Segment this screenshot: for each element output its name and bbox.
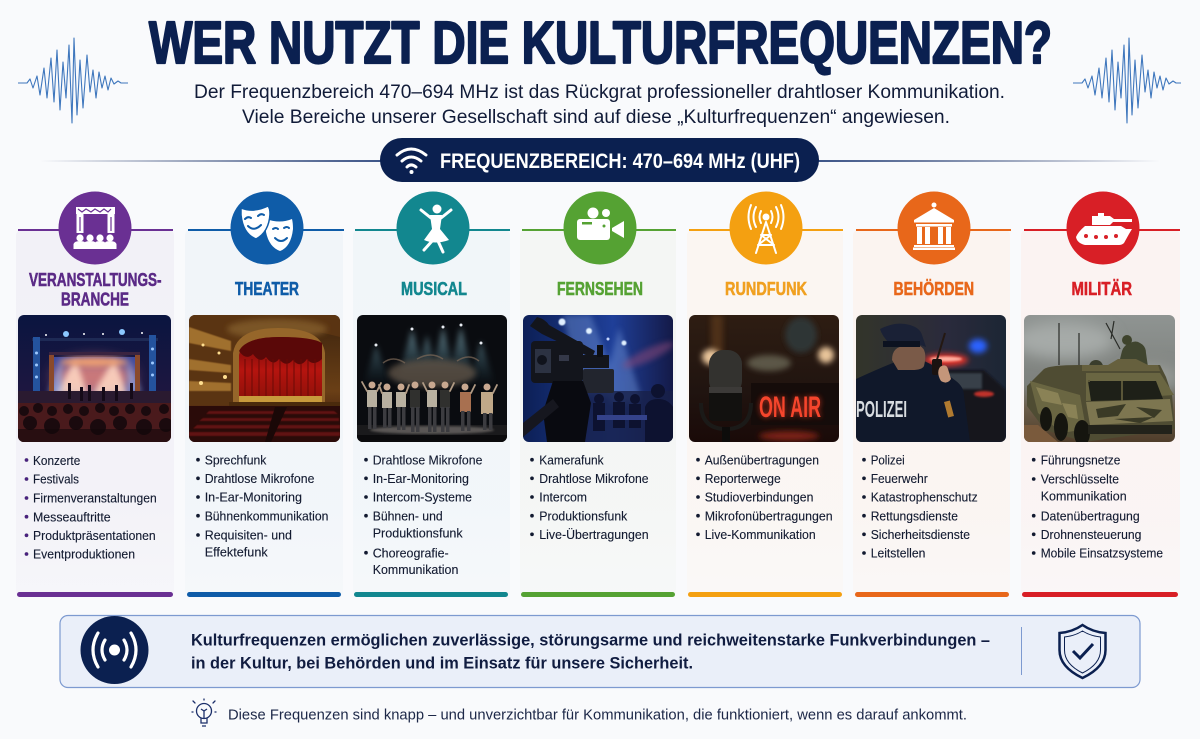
- feature list: Festivals: [33, 472, 79, 487]
- feature list: [696, 452, 833, 542]
- icon: wifi: [397, 149, 426, 174]
- icon: dancer: [396, 192, 470, 264]
- feature list: Messeauftritte: [33, 509, 111, 524]
- feature list: Bühnenkommunikation: [205, 508, 328, 523]
- feature list: [530, 452, 649, 542]
- feature list: Kamerafunk: [539, 452, 604, 467]
- panel: Musical: [353, 192, 510, 597]
- callout text: in der Kultur, bei Behörden und im Einsatz für unsere Sicherheit.: [191, 654, 693, 672]
- icon: stage truss and audience: [58, 192, 132, 264]
- panel: Behörden: [853, 192, 1011, 597]
- feature list: Live-Kommunikation: [705, 527, 816, 542]
- icon: waveform right: [1073, 38, 1181, 123]
- feature list: Katastrophenschutz: [871, 490, 978, 505]
- feature list: Datenübertragung: [1041, 508, 1140, 523]
- photo: theater hall: [189, 315, 340, 442]
- feature list: Sprechfunk: [205, 452, 267, 467]
- heading: THEATER: [235, 279, 299, 299]
- feature list: [862, 452, 978, 561]
- subtitle: [194, 82, 1005, 128]
- feature list: In-Ear-Monitoring: [205, 490, 302, 505]
- photo: on air microphone: [689, 315, 839, 442]
- heading: BEHÖRDEN: [894, 279, 974, 299]
- divider line left: [40, 160, 385, 162]
- pill label: FREQUENZBEREICH: 470–694 MHz (UHF): [440, 150, 800, 173]
- feature list: Kommunikation: [373, 562, 458, 577]
- feature list: Konzerte: [33, 453, 80, 468]
- feature list: Drohnensteuerung: [1041, 527, 1141, 542]
- feature list: Führungsnetze: [1041, 452, 1120, 467]
- feature list: Choreografie-: [373, 545, 449, 560]
- feature list: Eventproduktionen: [33, 547, 135, 562]
- callout text: [191, 632, 990, 672]
- photo: TV camera: [523, 315, 673, 442]
- feature list: Produktionsfunk: [539, 508, 628, 523]
- feature list: Intercom-Systeme: [373, 490, 472, 505]
- icon: radio tower: [730, 192, 802, 264]
- photo: concert stage: [18, 315, 171, 442]
- heading: MUSICAL: [401, 279, 467, 299]
- feature list: Produktionsfunk: [373, 525, 463, 540]
- panel: Militär: [1014, 192, 1180, 597]
- feature list: Verschlüsselte: [1041, 472, 1119, 487]
- panel: Rundfunk: [687, 192, 843, 597]
- feature list: Requisiten- und: [205, 528, 292, 543]
- icon: government building: [898, 192, 970, 264]
- feature list: Drahtlose Mikrofone: [205, 471, 314, 486]
- footer note: Diese Frequenzen sind knapp – und unverzichtbar für Kommunikation, die funktioniert, wenn es darauf ankommt.: [228, 708, 967, 724]
- subtitle: Viele Bereiche unserer Gesellschaft sind auf diese „Kulturfrequenzen“ angewiesen.: [242, 107, 950, 128]
- icon: theater masks: [230, 192, 304, 264]
- heading: MILITÄR: [1072, 279, 1132, 299]
- panel: Fernsehen: [520, 192, 676, 597]
- icon: video camera: [564, 192, 636, 264]
- frequency pill: [380, 138, 819, 182]
- feature list: Rettungsdienste: [871, 508, 958, 523]
- icon: tank: [1066, 192, 1140, 264]
- feature list: Drahtlose Mikrofone: [539, 471, 649, 486]
- feature list: Feuerwehr: [871, 471, 928, 486]
- feature list: Mobile Einsatzsysteme: [1041, 546, 1163, 561]
- photo: police officer: POLIZEI: [856, 396, 907, 422]
- callout text: Kulturfrequenzen ermöglichen zuverlässige, störungsarme und reichweitenstarke Funkverbindungen –: [191, 632, 990, 650]
- feature list: Bühnen- und: [373, 508, 443, 523]
- icon: shield with check: [1060, 625, 1106, 678]
- panel: Theater: [185, 192, 344, 597]
- feature list: Polizei: [871, 452, 905, 467]
- subtitle: Der Frequenzbereich 470–694 MHz ist das Rückgrat professioneller drahtloser Kommunikation.: [194, 82, 1005, 103]
- panel: Veranstaltungsbranche: [16, 192, 174, 597]
- feature list: [25, 453, 157, 562]
- feature list: Live-Übertragungen: [539, 527, 649, 542]
- feature list: [196, 452, 328, 560]
- photo: military vehicle: [1024, 315, 1175, 442]
- feature list: Intercom: [539, 490, 587, 505]
- feature list: Studioverbindungen: [705, 490, 813, 505]
- feature list: Effektefunk: [205, 545, 268, 560]
- heading: BRANCHE: [61, 290, 129, 310]
- icon: broadcast signal: [80, 616, 148, 684]
- feature list: Produktpräsentationen: [33, 528, 156, 543]
- heading: [29, 270, 162, 310]
- feature list: Mikrofonübertragungen: [705, 508, 833, 523]
- feature list: Außenübertragungen: [705, 452, 819, 467]
- heading: VERANSTALTUNGS-: [29, 270, 162, 290]
- divider line right: [815, 160, 1160, 162]
- icon: light bulb: [192, 699, 216, 726]
- feature list: Reporterwege: [705, 471, 781, 486]
- heading: RUNDFUNK: [725, 279, 807, 299]
- feature list: Sicherheitsdienste: [871, 527, 970, 542]
- feature list: In-Ear-Monitoring: [373, 471, 469, 486]
- feature list: [1032, 452, 1163, 561]
- heading: FERNSEHEN: [557, 279, 643, 299]
- icon: waveform left: [18, 38, 128, 123]
- feature list: Leitstellen: [871, 546, 925, 561]
- photo: musical ensemble: [357, 315, 507, 442]
- photo: police officer: [856, 315, 1006, 442]
- feature list: Drahtlose Mikrofone: [373, 452, 482, 467]
- feature list: Firmenveranstaltungen: [33, 491, 157, 506]
- callout banner: [60, 616, 1140, 688]
- feature list: [364, 452, 482, 577]
- feature list: Kommunikation: [1041, 488, 1127, 503]
- divider: [1021, 627, 1022, 675]
